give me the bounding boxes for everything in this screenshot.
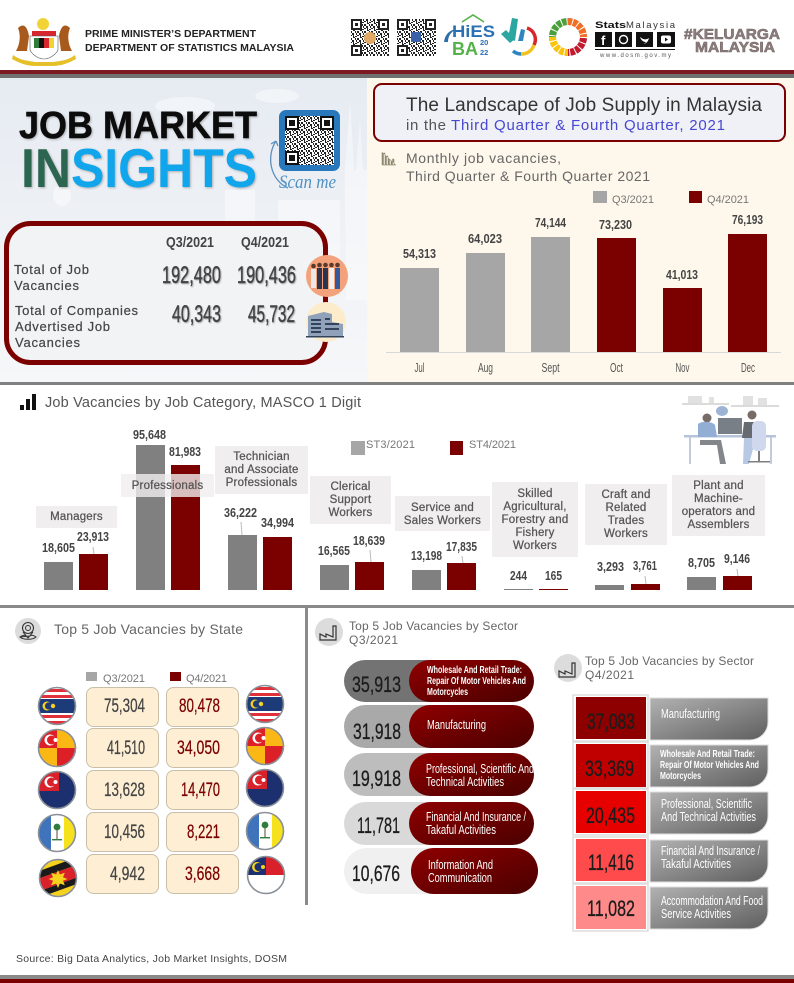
logo: StatsMalaysia social block: Malaysia [626, 20, 676, 31]
category: craft and trades: 3,293 [597, 559, 624, 574]
row: manufacturing [344, 705, 534, 748]
category: skilled agricultural: Skilled [517, 488, 553, 500]
category: professionals [121, 427, 214, 590]
row: financial [573, 837, 768, 883]
row: Kuala Lumpur [38, 685, 284, 726]
row: financial: Takaful Activities [426, 822, 496, 837]
row: information: Communication [428, 870, 492, 885]
category: professionals: 95,648 [133, 427, 166, 442]
category: managers: 18,605 [42, 540, 75, 555]
row: Selangor: 34,050 [177, 737, 220, 759]
category: plant and machine operators [672, 475, 765, 590]
legend [351, 439, 516, 455]
row: wholesale and retail: Repair Of Motor Vehicles And [427, 676, 526, 687]
heading: landscape of job supply: The Landscape of Job Supply in Malaysia [406, 95, 762, 116]
panel: job market insights [0, 78, 367, 382]
category: skilled agricultural: 165 [545, 568, 562, 583]
icon: Malaysia coat of arms [12, 18, 76, 66]
row: wholesale and retail [573, 742, 768, 788]
row: accommodation [573, 884, 768, 931]
heading [585, 654, 754, 682]
row: total of companies: 45,732 [248, 301, 295, 328]
logo: HIES BA 2022: 20 [480, 38, 488, 47]
row: financial: 11,416 [588, 850, 634, 875]
icon: factory [554, 654, 582, 682]
category: managers [36, 506, 117, 590]
category: plant and machine operators: Plant and [693, 480, 744, 492]
bar: July: 54,313 [403, 246, 436, 261]
chart subtitle: Third Quarter & Fourth Quarter 2021 [406, 168, 650, 184]
footer rule [0, 975, 794, 983]
category: managers: Managers [50, 511, 103, 523]
bar: August: 64,023 [468, 231, 502, 246]
bar: October [597, 217, 636, 375]
bar: September: Sept [542, 360, 560, 375]
logo: HIES BA 2022: BA [452, 39, 478, 59]
logo: Keluarga Malaysia [684, 26, 780, 56]
category: plant and machine operators: 8,705 [688, 555, 715, 570]
row: information [344, 848, 538, 894]
heading [349, 619, 518, 647]
row: accommodation: 11,082 [587, 896, 635, 921]
row: accommodation: Service Activities [661, 906, 731, 921]
row: manufacturing: 31,918 [353, 719, 401, 744]
panel: job vacancies by category [20, 394, 779, 590]
category: clerical: Support [330, 494, 372, 506]
category: craft and trades: Trades [608, 515, 644, 527]
row: wholesale and retail [344, 660, 534, 702]
heading: Top 5 Job Vacancies by State [54, 621, 243, 637]
row: Selangor [38, 727, 284, 768]
category: professionals: 81,983 [169, 444, 201, 459]
row: professional: And Technical Activities [661, 809, 756, 824]
heading: Job Vacancies by Job Category, MASCO 1 Digit [45, 395, 361, 411]
column headings [166, 234, 289, 251]
title: INSIGHTS: INSIGHTS [21, 137, 257, 199]
heading: Top 5 Job Vacancies by Sector [349, 619, 518, 633]
decorative skyline and clouds [53, 89, 367, 300]
row: financial: Takaful Activities [661, 856, 731, 871]
bar: August [466, 231, 505, 375]
row: total of companies: Vacancies [15, 335, 80, 350]
logo: HIES BA 2022: 22 [480, 48, 488, 57]
row: Sarawak and Melaka: 3,668 [185, 863, 220, 885]
heading: Q4/2021 [585, 668, 634, 682]
bar: November [663, 267, 702, 375]
row: professional: 19,918 [352, 766, 401, 791]
bar chart: monthly vacancies [386, 212, 781, 375]
panel: top 5 by sector Q3 [315, 618, 538, 894]
legend: Q3/2021 [612, 194, 654, 206]
logo: SDG wheel [552, 21, 584, 52]
panel: top 5 by state [15, 618, 285, 911]
heading: Q3/2021 [349, 633, 398, 647]
panel: top 5 by sector Q4 [554, 654, 768, 931]
row: wholesale and retail: Motorcycles [427, 687, 468, 698]
row: total of companies: 40,343 [172, 301, 221, 328]
row: wholesale and retail: 33,369 [585, 756, 634, 781]
panel: quarter totals [6, 224, 348, 362]
category: plant and machine operators: Machine- [694, 493, 743, 505]
icon: QR code with crest [351, 19, 389, 56]
row: Pulau Pinang: 10,456 [104, 821, 145, 843]
title: JOB MARKET: JOB MARKET [19, 105, 257, 147]
column headings: Q3/2021 [166, 234, 214, 251]
row: financial: Financial And Insurance / [426, 809, 526, 824]
row: professional [573, 789, 768, 835]
heading: organisation name: DEPARTMENT OF STATISTICS MALAYSIA [85, 42, 294, 54]
row: Johor: 14,470 [181, 779, 220, 801]
column headings: Q4/2021 [241, 234, 289, 251]
legend [86, 672, 227, 685]
category: plant and machine operators: operators and [682, 506, 755, 518]
logo: Keluarga Malaysia: #KELUARGA [684, 26, 780, 43]
legend: Q3/2021 [103, 673, 145, 685]
logo: StatsMalaysia social block [595, 20, 676, 59]
row: total of job vacancies: 190,436 [237, 262, 296, 289]
category: craft and trades [585, 484, 667, 590]
row: information: 10,676 [352, 861, 400, 886]
heading: landscape of job supply: Third Quarter & Fourth Quarter, 2021 [451, 117, 725, 134]
panel: monthly job supply [367, 78, 794, 382]
category: plant and machine operators: Assemblers [687, 519, 750, 531]
icon: map pin [15, 618, 41, 644]
category: technicians: Technician [233, 451, 290, 463]
bar: December: 76,193 [732, 212, 763, 227]
category: craft and trades: Related [605, 502, 647, 514]
row: wholesale and retail: Wholesale And Retail Trade: [660, 749, 755, 760]
logo: HIES BA 2022 [444, 15, 495, 59]
logo: Keluarga Malaysia: MALAYSIA [695, 39, 775, 56]
logo: StatsMalaysia social block: www.dosm.gov.my [599, 53, 671, 59]
row: total of job vacancies: Vacancies [14, 278, 80, 293]
row: wholesale and retail: 35,913 [352, 672, 401, 697]
bar: August: Aug [478, 360, 493, 375]
bar: November: 41,013 [666, 267, 698, 282]
illustration: two colleagues at a desk [682, 396, 779, 464]
row: Pulau Pinang: 8,221 [187, 821, 220, 843]
row: Kuala Lumpur: 80,478 [179, 695, 220, 717]
row: information: Information And [428, 857, 493, 872]
legend: Q4/2021 [707, 194, 749, 206]
category: technicians: and Associate [224, 464, 299, 476]
icon: QR code with Facebook [397, 19, 436, 56]
arrow: scan me [271, 141, 288, 188]
category: technicians [215, 446, 308, 590]
row: professional: Technical Activities [426, 774, 504, 789]
category: craft and trades: 3,761 [633, 558, 657, 573]
bar: September [531, 215, 570, 375]
row: Pulau Pinang [38, 812, 284, 852]
bar: December [728, 212, 767, 375]
row: total of job vacancies: Total of Job [14, 262, 89, 277]
bar: October: 73,230 [599, 217, 632, 232]
heading: organisation name [85, 28, 294, 54]
category: technicians: 34,994 [261, 515, 295, 530]
bar: September: 74,144 [535, 215, 567, 230]
category: service and sales: 17,835 [446, 539, 477, 554]
category: service and sales [395, 496, 490, 590]
row: professional: Professional, Scientific [661, 796, 752, 811]
legend: ST4/2021 [469, 439, 516, 451]
source note: Source: Big Data Analytics, Job Market Insights, DOSM [16, 953, 287, 965]
category: craft and trades: Craft and [601, 489, 651, 501]
row: Selangor: 41,510 [107, 737, 145, 759]
row: manufacturing: Manufacturing [661, 706, 720, 721]
heading: landscape of job supply: in the [406, 117, 446, 134]
row: Sarawak and Melaka [25, 845, 285, 911]
row: manufacturing: 37,083 [587, 709, 635, 734]
row: total of job vacancies: 192,480 [162, 262, 221, 289]
category: plant and machine operators: 9,146 [724, 551, 750, 566]
row: wholesale and retail: Motorcycles [660, 771, 701, 782]
category: skilled agricultural: Forestry and [502, 514, 568, 526]
category: service and sales: 13,198 [411, 548, 442, 563]
row: financial: 11,781 [357, 813, 400, 838]
heading: landscape of job supply [374, 84, 785, 141]
heading: Top 5 Job Vacancies by Sector [585, 654, 754, 668]
row: total of companies: Advertised Job [15, 319, 110, 334]
row: professional: Professional, Scientific And [426, 761, 534, 776]
category: clerical: Clerical [331, 481, 370, 493]
legend: Q4/2021 [186, 673, 227, 685]
row: professional [344, 753, 534, 796]
category: skilled agricultural: Workers [513, 540, 557, 552]
row: Kuala Lumpur: 75,304 [104, 695, 145, 717]
icon: factory [315, 618, 343, 646]
row: professional: 20,435 [586, 803, 635, 828]
icon: office building [306, 302, 346, 342]
row: total of companies: Total of Companies [15, 303, 138, 318]
category: skilled agricultural [492, 482, 578, 590]
category: clerical [310, 476, 391, 590]
category: clerical: 16,565 [318, 543, 350, 558]
icon: scan me QR code [279, 110, 340, 171]
logo: StatsMalaysia social block: Stats [595, 20, 626, 31]
category: managers: 23,913 [77, 529, 109, 544]
category: technicians: Professionals [226, 477, 297, 489]
row: Johor: 13,628 [104, 779, 145, 801]
row: financial [344, 802, 534, 845]
bar: July: Jul [414, 360, 425, 375]
category: service and sales: Service and [411, 502, 474, 514]
label: scan me: Scan me [279, 172, 336, 193]
row: total of job vacancies [14, 262, 296, 293]
logo: statistics day [501, 18, 535, 54]
legend: ST3/2021 [366, 439, 415, 451]
row: wholesale and retail: Wholesale And Retail Trade: [427, 665, 522, 676]
chart subtitle: Monthly job vacancies, [406, 150, 561, 166]
category: clerical: 18,639 [353, 533, 385, 548]
row: Johor [38, 769, 284, 810]
bar: November: Nov [676, 360, 690, 375]
legend [593, 191, 749, 206]
bar: October: Oct [610, 360, 623, 375]
row: manufacturing: Manufacturing [427, 717, 486, 732]
category: technicians: 36,222 [224, 505, 257, 520]
category: service and sales: Sales Workers [404, 515, 481, 527]
header band [12, 15, 780, 66]
bar: December: Dec [741, 360, 755, 375]
chart subtitle [406, 150, 650, 184]
row: manufacturing [573, 695, 768, 741]
category: professionals: Professionals [132, 480, 203, 492]
heading: organisation name: PRIME MINISTER’S DEPARTMENT [85, 28, 257, 40]
row: Sarawak and Melaka: 4,942 [110, 863, 145, 885]
category: clerical: Workers [328, 507, 373, 519]
logo: StatsMalaysia social block: f [601, 33, 606, 48]
icon: mini bar chart [382, 152, 396, 165]
icon: bars [20, 394, 36, 410]
category: skilled agricultural: 244 [510, 568, 528, 583]
category: craft and trades: Workers [604, 528, 648, 540]
logo: HIES BA 2022: HiES [452, 22, 495, 41]
category: skilled agricultural: Agricultural, [503, 501, 567, 513]
row: total of companies [15, 301, 295, 350]
bar: July [400, 246, 439, 375]
category: skilled agricultural: Fishery [515, 527, 555, 539]
header rule [0, 70, 794, 78]
icon: workers [306, 255, 348, 297]
